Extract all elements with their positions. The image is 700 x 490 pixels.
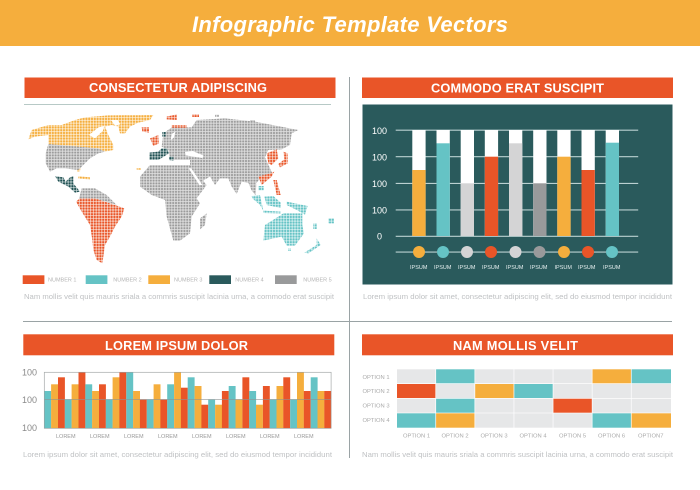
- legend: NUMBER 4: [235, 278, 264, 284]
- x axis labels: LOREM: [124, 434, 144, 440]
- caption: column chart: Lorem ipsum dolor sit amet, consectetur adipiscing elit, sed do eiusmod tempor incididunt: [363, 292, 673, 301]
- heading: nam mollis velit: NAM MOLLIS VELIT: [453, 338, 578, 353]
- panel: option matrix: [362, 334, 674, 459]
- x axis labels: LOREM: [56, 434, 76, 440]
- chart background: [362, 104, 672, 284]
- legend: NUMBER 2: [113, 278, 142, 284]
- grouped bars: [44, 372, 331, 428]
- title banner: [0, 0, 700, 46]
- panel: column chart: [362, 78, 673, 301]
- row labels: OPTION 2: [362, 389, 390, 395]
- x axis labels: [56, 434, 314, 440]
- title banner: Infographic Template Vectors: [192, 12, 508, 37]
- heading: commodo erat suscipit: [362, 78, 673, 98]
- heading: lorem ipsum dolor: [23, 334, 334, 355]
- x axis labels: LOREM: [226, 434, 246, 440]
- heading: consectetur adipiscing: CONSECTETUR ADIPISCING: [89, 80, 267, 95]
- legend: NUMBER 3: [174, 278, 202, 284]
- matrix cells: [397, 369, 671, 428]
- x axis labels: LOREM: [260, 434, 280, 440]
- caption: bar chart: Lorem ipsum dolor sit amet, consectetur adipiscing elit, sed do eiusmod tempor incididunt: [23, 450, 333, 459]
- x axis labels: LOREM: [90, 434, 110, 440]
- legend: NUMBER 5: [303, 278, 332, 284]
- panel: grouped bar chart: [22, 334, 334, 459]
- legend dots and labels: IPSUM: [482, 265, 500, 271]
- row labels: OPTION 3: [362, 404, 390, 410]
- heading: nam mollis velit: [362, 334, 673, 355]
- column labels: OPTION 2: [442, 434, 469, 440]
- legend dots and labels: IPSUM: [530, 265, 548, 271]
- x axis labels: LOREM: [192, 434, 212, 440]
- heading: consectetur adipiscing: [24, 78, 336, 98]
- legend dots and labels: IPSUM: [434, 265, 452, 271]
- y axis labels: 100: [372, 126, 387, 136]
- dotted world map: [28, 114, 334, 263]
- y axis labels: [372, 126, 387, 242]
- panel: world map: [23, 78, 335, 301]
- column labels: OPTION7: [638, 434, 663, 440]
- legend: NUMBER 1: [48, 278, 76, 284]
- y axis labels: [22, 368, 37, 433]
- column labels: OPTION 1: [403, 434, 430, 440]
- column labels: OPTION 4: [520, 434, 547, 440]
- y axis labels: 100: [22, 395, 37, 405]
- legend dots and labels: [410, 246, 621, 271]
- caption: map: Nam mollis velit quis mauris sriala a commris suscipit lacinia urna, a commodo erat suscipit: [24, 292, 335, 301]
- row labels: OPTION 4: [362, 418, 390, 424]
- column labels: OPTION 5: [559, 434, 586, 440]
- column labels: OPTION 6: [598, 434, 625, 440]
- legend dots and labels: IPSUM: [554, 265, 572, 271]
- column labels: [403, 434, 663, 440]
- legend: [23, 275, 332, 284]
- y axis labels: 100: [372, 179, 387, 189]
- x axis labels: LOREM: [158, 434, 178, 440]
- y axis labels: 100: [372, 206, 387, 216]
- legend dots and labels: IPSUM: [603, 265, 621, 271]
- y axis labels: 0: [377, 232, 382, 242]
- legend dots and labels: IPSUM: [506, 265, 524, 271]
- caption: matrix: Nam mollis velit quis mauris sriala a commris suscipit lacinia urna, a commodo erat suscipit: [362, 450, 674, 459]
- legend dots and labels: IPSUM: [458, 265, 476, 271]
- y axis labels: 100: [22, 368, 37, 378]
- heading: commodo erat suscipit: COMMODO ERAT SUSCIPIT: [431, 80, 604, 96]
- row labels: [362, 375, 390, 424]
- legend dots and labels: IPSUM: [410, 265, 428, 271]
- column bars: [412, 130, 619, 236]
- row labels: OPTION 1: [362, 375, 390, 381]
- column labels: OPTION 3: [480, 434, 508, 440]
- x axis labels: LOREM: [294, 434, 314, 440]
- heading: lorem ipsum dolor: LOREM IPSUM DOLOR: [105, 338, 248, 353]
- legend dots and labels: IPSUM: [578, 265, 596, 271]
- y axis labels: 100: [22, 423, 37, 433]
- y axis labels: 100: [372, 152, 387, 162]
